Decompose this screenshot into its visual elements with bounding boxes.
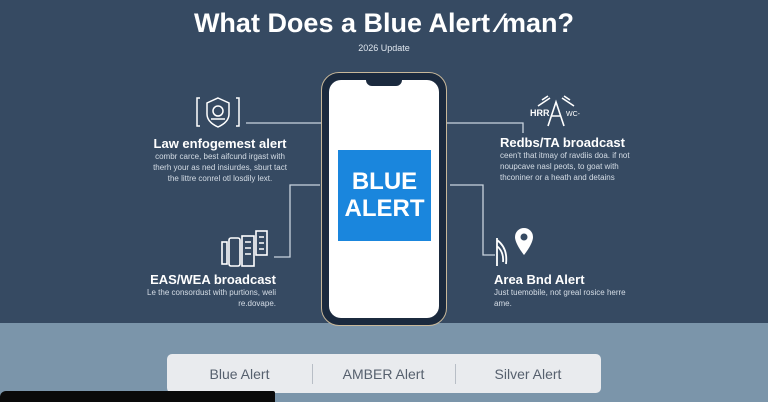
panel: EAS/WEA: Le the consordust with purtions, weli re.dovape.: [147, 288, 276, 308]
subtitle: 2026 Update: [358, 43, 410, 53]
icon: devices: [221, 230, 268, 267]
blue alert box: [338, 150, 431, 241]
bottom band: [0, 323, 768, 402]
panel: area alert: Area Bnd Alert: [494, 272, 585, 287]
icon: antenna: WC-: [566, 111, 581, 118]
panel: broadcast: [500, 135, 630, 182]
card: alert types: AMBER Alert: [343, 366, 424, 382]
card: alert types: [167, 354, 601, 393]
blue alert box: ALERT: [344, 195, 424, 222]
icon: badge: [196, 97, 240, 128]
panel: broadcast: Redbs/TA broadcast: [500, 135, 625, 150]
panel: EAS/WEA: EAS/WEA broadcast: [150, 272, 276, 287]
panel: area alert: Just tuemobile, not greal rosice herre ame.: [494, 288, 626, 308]
icon: antenna: [530, 95, 581, 126]
icon: location pin: [496, 228, 533, 266]
panel: law enforcement: Law enfogemest alert: [154, 136, 286, 151]
panel: law enforcement: [153, 136, 287, 183]
panel: area alert: [494, 272, 626, 308]
card: alert types: Silver Alert: [495, 366, 561, 382]
black brush stroke: [0, 391, 275, 402]
panel: broadcast: ceen't that itmay of ravdiis doa. if not noupcave nasl peots, to goat with thconiner or a heath and detains: [500, 151, 630, 182]
panel: EAS/WEA: [147, 272, 276, 308]
screen: [329, 80, 439, 318]
card: alert types: Blue Alert: [210, 366, 269, 382]
blue alert box: BLUE: [352, 168, 417, 195]
panel: law enforcement: combr carce, best aifcund irgast with therh your as ned insiurdes, sburt tact the littre conrel otl losdily lext.: [153, 152, 287, 183]
phone: [321, 72, 447, 326]
notch: [366, 79, 402, 86]
icon: antenna: HRR: [530, 108, 550, 118]
title: What Does a Blue Alert ⁄man?: [194, 8, 574, 38]
